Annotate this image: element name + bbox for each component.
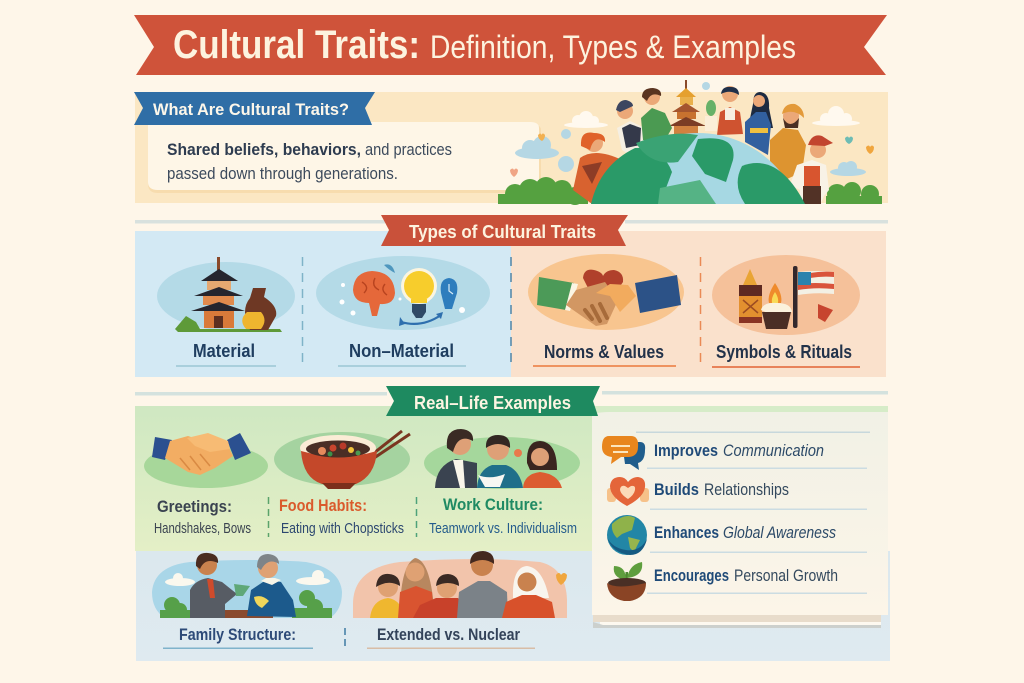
underline decoration xyxy=(533,365,676,367)
illustration: clouds and hearts xyxy=(510,82,874,177)
person: woman with red hat xyxy=(573,133,622,204)
dashed divider xyxy=(302,257,304,367)
label: food habits: Food Habits: xyxy=(279,496,367,515)
description: work culture: Teamwork vs. Individualism xyxy=(429,521,577,537)
panel: what are cultural traits xyxy=(134,80,888,205)
illustration: bushes xyxy=(498,177,882,205)
definition text: passed down through generations. xyxy=(167,164,398,183)
benefit: builds relationships xyxy=(607,477,789,506)
underline decoration xyxy=(176,365,276,367)
benefit: enhances global awareness: Global Awareness xyxy=(723,524,836,542)
dashed divider xyxy=(268,497,270,537)
title text: Cultural Traits: xyxy=(173,23,420,67)
benefit: enhances global awareness: Enhances xyxy=(654,524,719,542)
title banner xyxy=(134,15,887,75)
underline decoration xyxy=(338,365,466,367)
icon: bowl with chopsticks xyxy=(300,431,410,489)
dashed divider xyxy=(344,628,346,648)
underline decoration xyxy=(712,366,860,368)
person: man in yellow with turban xyxy=(770,104,806,180)
label: norms and values: Norms & Values xyxy=(544,342,664,362)
real-life ribbon heading: Real–Life Examples xyxy=(414,393,571,413)
panel: examples strip xyxy=(592,406,888,415)
shelf decoration xyxy=(593,615,881,628)
person: woman in red xyxy=(717,86,743,135)
label: symbols and rituals: Symbols & Rituals xyxy=(716,342,852,362)
description: greetings: Handshakes, Bows xyxy=(154,521,251,537)
real-life ribbon heading xyxy=(386,386,600,416)
label: material: Material xyxy=(193,341,255,361)
person: boy with red hat xyxy=(790,135,833,204)
benefit: builds relationships: Relationships xyxy=(704,481,789,499)
dashed divider xyxy=(700,257,702,367)
family illustration: exchange scene xyxy=(152,553,342,618)
type: material xyxy=(157,257,295,367)
icon: brain and bulbs xyxy=(340,264,465,326)
icon: three colleagues xyxy=(435,429,562,488)
underline decoration xyxy=(367,648,535,649)
benefit: improves communication: Improves xyxy=(654,442,718,460)
benefit: enhances global awareness xyxy=(607,515,836,555)
illustration: globe xyxy=(591,133,805,204)
definition text xyxy=(167,140,452,183)
illustration: pagoda xyxy=(669,80,717,134)
example: greetings xyxy=(144,433,268,537)
type ribbon heading: Types of Cultural Traits xyxy=(409,222,596,242)
benefit: improves communication: Communication xyxy=(723,442,824,460)
icon: pagoda and pots xyxy=(175,257,282,332)
icon: handshake with heart xyxy=(537,270,681,326)
illustration: people around globe xyxy=(573,86,833,204)
type: symbols and rituals xyxy=(712,255,860,368)
title text: Definition, Types & Examples xyxy=(430,29,796,65)
definition text: and practices xyxy=(365,140,452,159)
panel: examples, family xyxy=(136,551,890,661)
panel: types, peach half xyxy=(511,231,886,377)
icon: sprout in bowl xyxy=(607,562,646,601)
section ribbon: what are cultural traits xyxy=(134,92,375,125)
dashed divider xyxy=(416,497,418,537)
dashed divider xyxy=(510,257,512,367)
underline decoration xyxy=(163,648,313,649)
person: man in dark vest xyxy=(616,100,645,158)
person: man in green xyxy=(641,88,672,143)
icon: totem, candle and flag xyxy=(739,266,834,329)
title text xyxy=(173,23,796,67)
definition card xyxy=(148,122,541,193)
icon: heart in hands xyxy=(607,477,649,506)
example: food habits xyxy=(274,431,410,537)
benefit: encourages personal growth: Personal Growth xyxy=(734,567,838,585)
icon: handshake xyxy=(152,433,251,475)
icon: speech bubbles xyxy=(602,436,645,470)
family illustration: extended family xyxy=(353,551,567,618)
label: family structure: Family Structure: xyxy=(179,625,296,644)
benefit: builds relationships: Builds xyxy=(654,481,699,499)
label: non-material: Non–Material xyxy=(349,341,454,361)
label: extended vs nuclear: Extended vs. Nuclear xyxy=(377,625,520,644)
description: food habits: Eating with Chopsticks xyxy=(281,520,404,537)
definition text: Shared beliefs, behaviors, xyxy=(167,140,361,159)
benefits list xyxy=(602,432,870,601)
example: work culture xyxy=(424,429,580,537)
icon: globe xyxy=(607,515,647,555)
benefit: encourages personal growth xyxy=(607,562,838,601)
panel: types, blue half xyxy=(135,231,511,377)
panel: examples, green xyxy=(135,406,592,551)
person: woman in blue xyxy=(745,92,773,155)
label: greetings: Greetings: xyxy=(157,497,232,516)
benefit: improves communication xyxy=(602,436,824,470)
label: work culture: Work Culture: xyxy=(443,495,543,514)
section divider: real-life xyxy=(135,391,888,396)
type: norms and values xyxy=(528,254,684,367)
section divider: types xyxy=(135,220,888,224)
benefit: encourages personal growth: Encourages xyxy=(654,567,729,585)
section ribbon: what are cultural traits: What Are Cultural Traits? xyxy=(153,100,349,119)
type: non-material xyxy=(316,256,490,367)
type ribbon heading xyxy=(381,215,628,246)
panel: benefits card xyxy=(592,412,888,628)
